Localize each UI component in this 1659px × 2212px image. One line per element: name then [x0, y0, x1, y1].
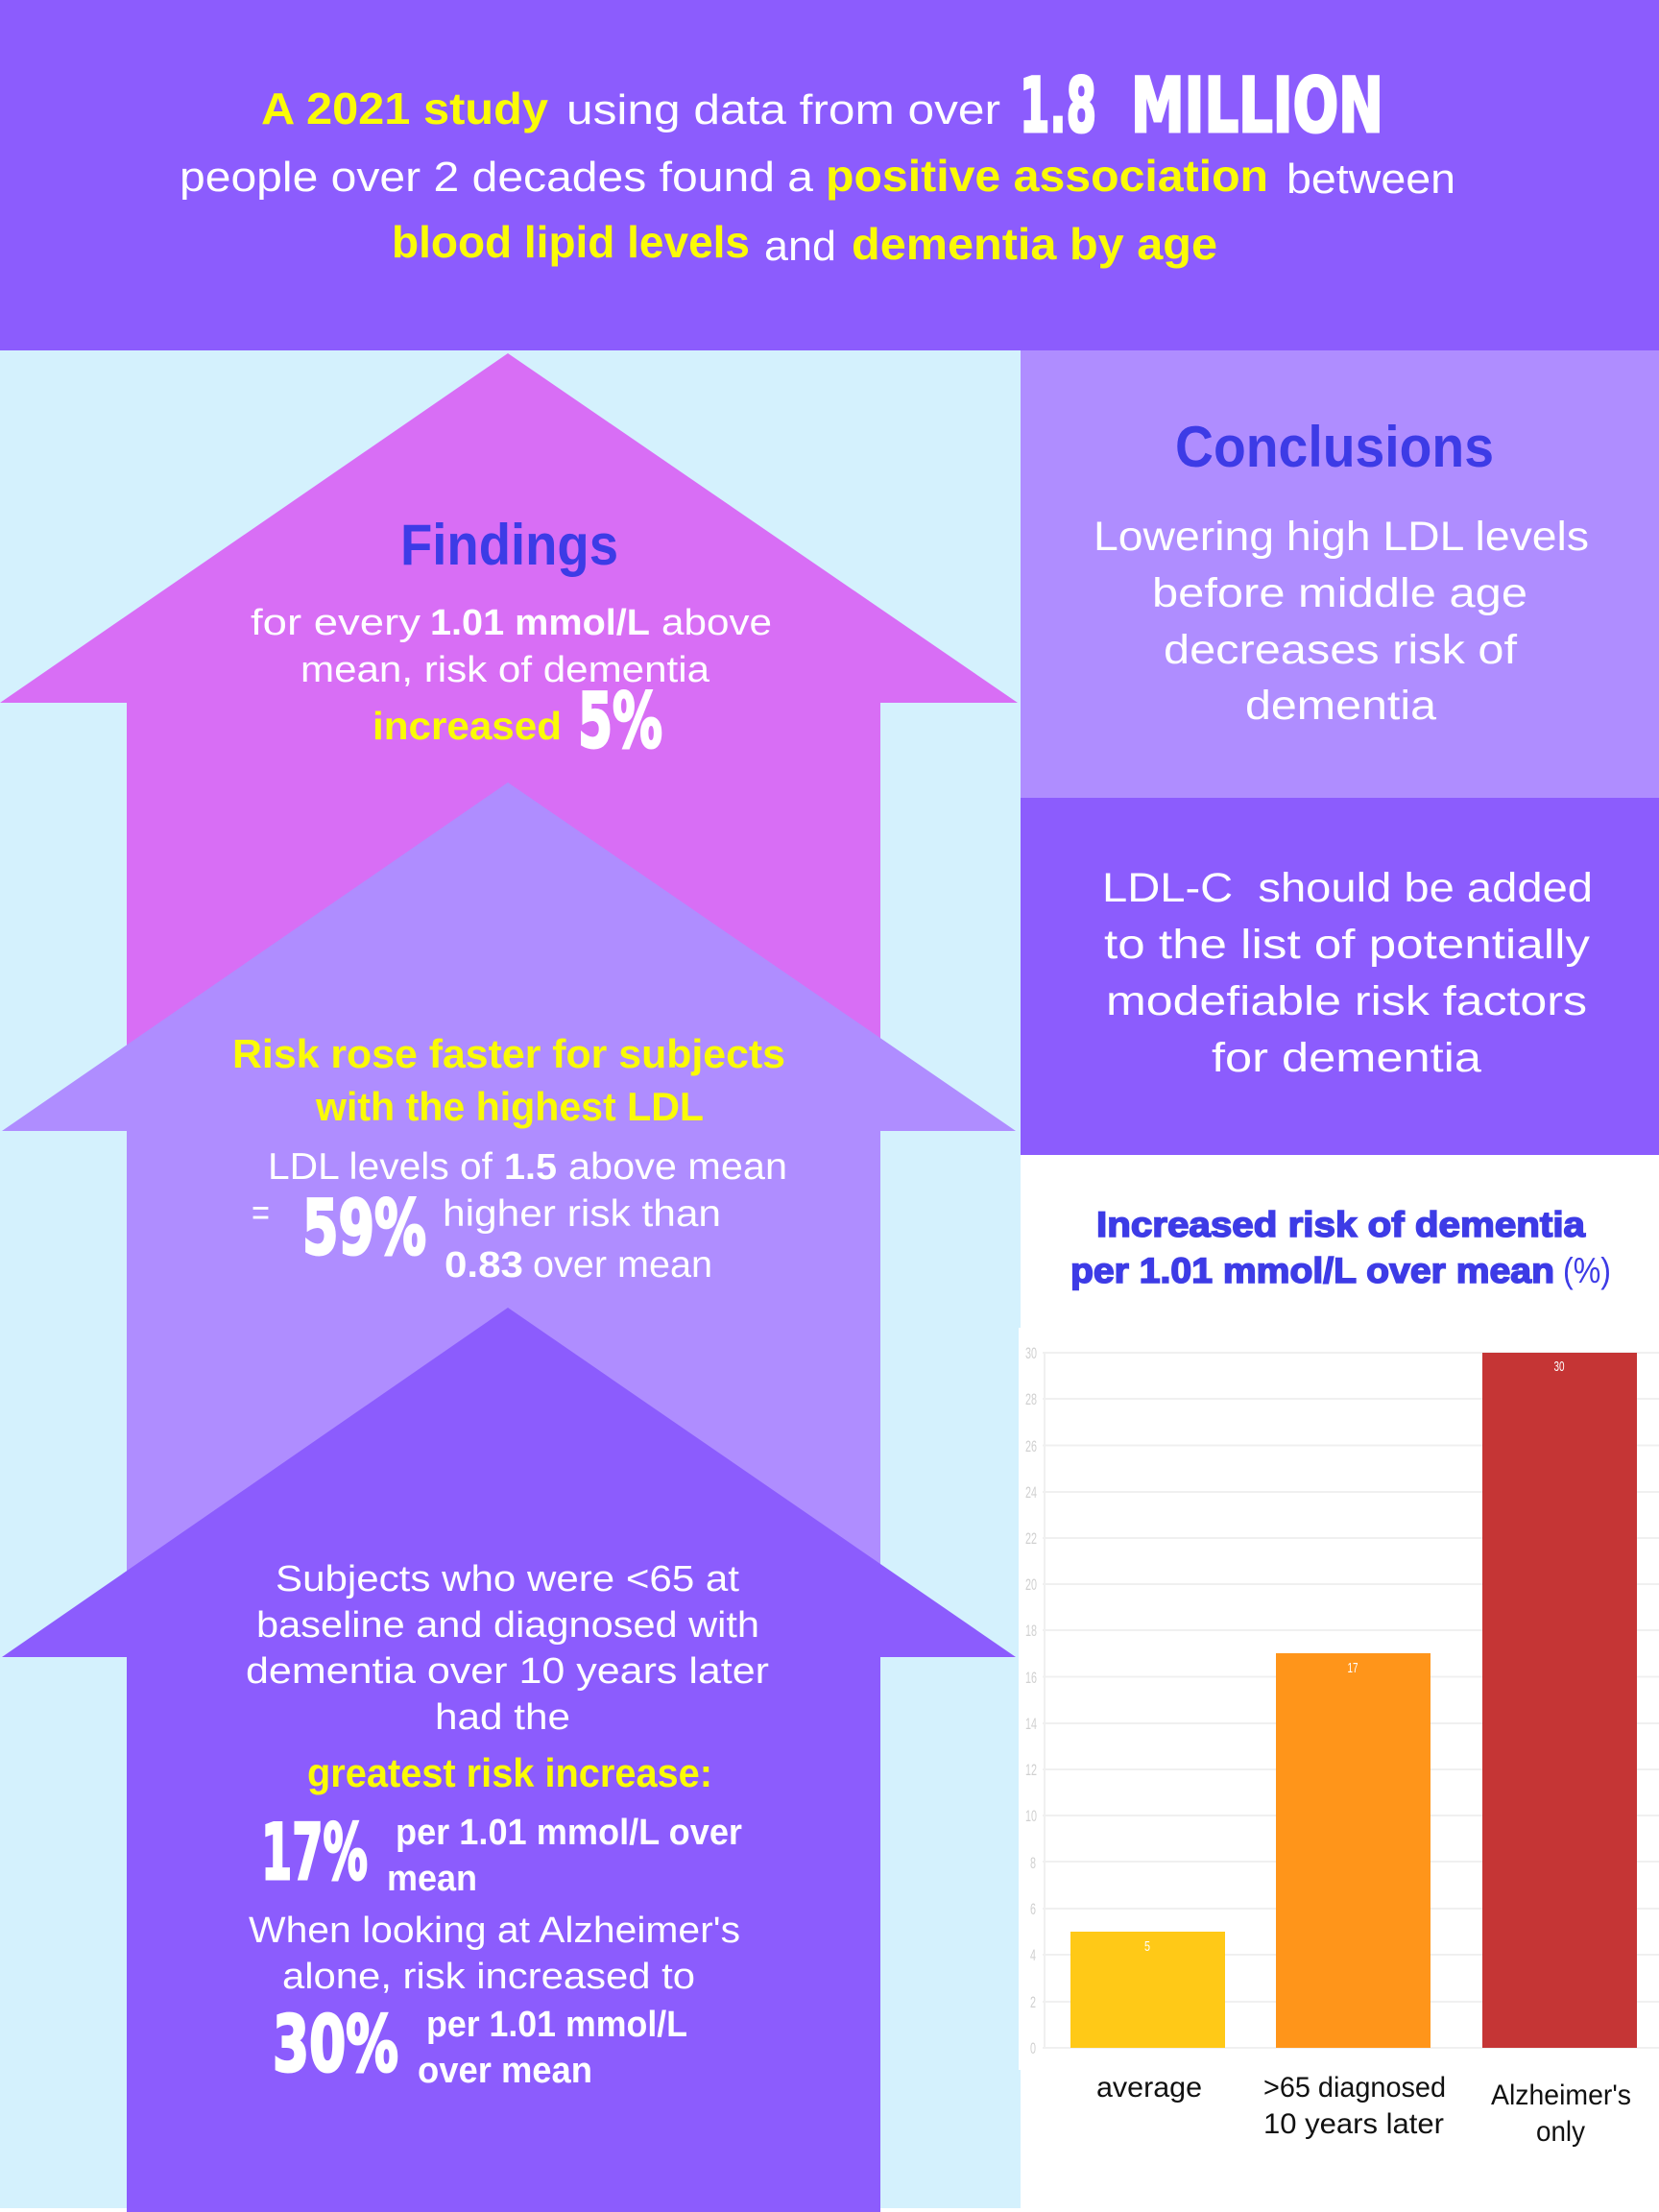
- stat: 17 percent: [261, 1808, 742, 1899]
- panel: chart: [1019, 1155, 1659, 2212]
- younger subjects text: greatest risk increase:: [307, 1750, 712, 1795]
- category labels: 10 years later: [1263, 2108, 1444, 2140]
- risk text: [252, 1146, 787, 1286]
- findings text: for every: [251, 603, 421, 643]
- y axis labels: 30: [1025, 1344, 1037, 1362]
- recommendation text: modefiable risk factors: [1106, 978, 1587, 1024]
- chart title: Increased risk of dementia: [1096, 1205, 1585, 1244]
- y axis labels: 6: [1030, 1900, 1036, 1918]
- header text: between: [1286, 156, 1455, 203]
- header text: people over 2 decades found a: [180, 154, 814, 201]
- stat: 30 percent: [273, 2000, 687, 2091]
- recommendation text: LDL-C should be added: [1102, 865, 1593, 911]
- y axis labels: 28: [1025, 1390, 1037, 1408]
- y axis labels: 16: [1025, 1669, 1037, 1687]
- findings text: 1.01 mmol/L: [430, 603, 650, 643]
- panel: conclusions: [1021, 350, 1659, 798]
- risk text: 59%: [302, 1186, 426, 1272]
- younger subjects text: had the: [435, 1697, 570, 1738]
- chart title: (%): [1563, 1251, 1611, 1290]
- bar chart: [1025, 1344, 1659, 2057]
- y axis labels: [1025, 1344, 1037, 2057]
- stat: 30 percent: 30%: [273, 2000, 398, 2089]
- header text: [180, 63, 1455, 270]
- conclusions text: decreases risk of: [1164, 627, 1518, 673]
- risk text: over mean: [533, 1244, 712, 1286]
- stat: 30 percent: over mean: [418, 2051, 592, 2091]
- younger subjects text: Subjects who were <65 at: [276, 1559, 739, 1599]
- alzheimer's text: alone, risk increased to: [282, 1957, 695, 1997]
- recommendation text: [1102, 865, 1593, 1081]
- panel: recommendation: [1021, 798, 1659, 1155]
- younger subjects text: dementia over 10 years later: [246, 1651, 769, 1692]
- risk text: 0.83: [445, 1245, 523, 1286]
- heading: conclusions: Conclusions: [1175, 415, 1494, 479]
- younger subjects text: baseline and diagnosed with: [256, 1605, 759, 1646]
- risk heading: [232, 1031, 785, 1129]
- risk text: =: [252, 1192, 270, 1234]
- heading: findings: Findings: [400, 513, 618, 577]
- y axis labels: 8: [1030, 1854, 1036, 1872]
- header text: MILLION: [1131, 63, 1383, 150]
- category labels: >65 diagnosed: [1263, 2072, 1446, 2104]
- header text: blood lipid levels: [392, 217, 750, 267]
- category labels: Alzheimer's: [1491, 2080, 1631, 2111]
- header text: positive association: [826, 151, 1268, 201]
- risk text: 1.5: [504, 1147, 557, 1188]
- bar: Alzheimer's only: [1482, 1353, 1637, 2048]
- y axis labels: 22: [1025, 1529, 1037, 1548]
- y axis labels: 14: [1025, 1715, 1037, 1733]
- stat: 17 percent: 17%: [261, 1808, 368, 1897]
- findings text: mean, risk of dementia: [301, 650, 710, 690]
- arrow: findings: [0, 353, 1018, 1152]
- stat: 17 percent: per 1.01 mmol/L over: [396, 1813, 742, 1853]
- findings text: [251, 603, 772, 765]
- findings text: increased: [373, 704, 562, 748]
- header text: A 2021 study: [261, 84, 548, 133]
- risk text: LDL levels of: [268, 1146, 493, 1188]
- alzheimer's text: When looking at Alzheimer's: [249, 1911, 740, 1951]
- arrow: greatest risk: [2, 1308, 1016, 2212]
- y axis labels: 12: [1025, 1761, 1037, 1779]
- y axis labels: 0: [1030, 2039, 1036, 2057]
- conclusions text: Lowering high LDL levels: [1094, 514, 1589, 560]
- header text: using data from over: [566, 86, 1000, 133]
- findings text: 5%: [578, 679, 662, 765]
- chart title: per 1.01 mmol/L over mean: [1070, 1251, 1554, 1290]
- y axis labels: 4: [1030, 1946, 1036, 1964]
- y axis labels: 24: [1025, 1483, 1037, 1502]
- stat: 17 percent: mean: [387, 1859, 477, 1899]
- header text: dementia by age: [852, 219, 1217, 269]
- y axis labels: 20: [1025, 1575, 1037, 1594]
- younger subjects text: [246, 1559, 769, 1795]
- findings text: above: [661, 603, 772, 643]
- category labels: average: [1096, 2072, 1202, 2104]
- category labels: only: [1536, 2116, 1585, 2148]
- conclusions text: dementia: [1245, 683, 1436, 729]
- risk text: above mean: [568, 1146, 787, 1188]
- risk text: higher risk than: [443, 1193, 721, 1235]
- category labels: [1096, 2072, 1631, 2148]
- conclusions text: before middle age: [1152, 570, 1527, 616]
- y axis labels: 26: [1025, 1437, 1037, 1455]
- header text: 1.8: [1020, 63, 1096, 150]
- y axis labels: 18: [1025, 1622, 1037, 1640]
- recommendation text: for dementia: [1212, 1035, 1481, 1081]
- conclusions text: [1094, 514, 1589, 729]
- y axis labels: 10: [1025, 1807, 1037, 1825]
- alzheimer's text: [249, 1911, 740, 1997]
- panel: header banner: [0, 0, 1659, 350]
- recommendation text: to the list of potentially: [1104, 922, 1591, 968]
- bar: average: 5: [1144, 1938, 1150, 1955]
- risk heading: Risk rose faster for subjects: [232, 1031, 785, 1076]
- bar: Alzheimer's only: 30: [1553, 1358, 1565, 1375]
- risk heading: with the highest LDL: [315, 1084, 704, 1129]
- bar: over 65 diagnosed: [1276, 1653, 1431, 2048]
- header text: and: [764, 223, 836, 270]
- bar: over 65 diagnosed: 17: [1348, 1660, 1358, 1676]
- stat: 30 percent: per 1.01 mmol/L: [426, 2005, 687, 2045]
- chart title: [1070, 1205, 1611, 1290]
- arrow: faster risk: [2, 782, 1016, 1632]
- y axis labels: 2: [1030, 1993, 1036, 2011]
- bar: average: [1070, 1932, 1225, 2048]
